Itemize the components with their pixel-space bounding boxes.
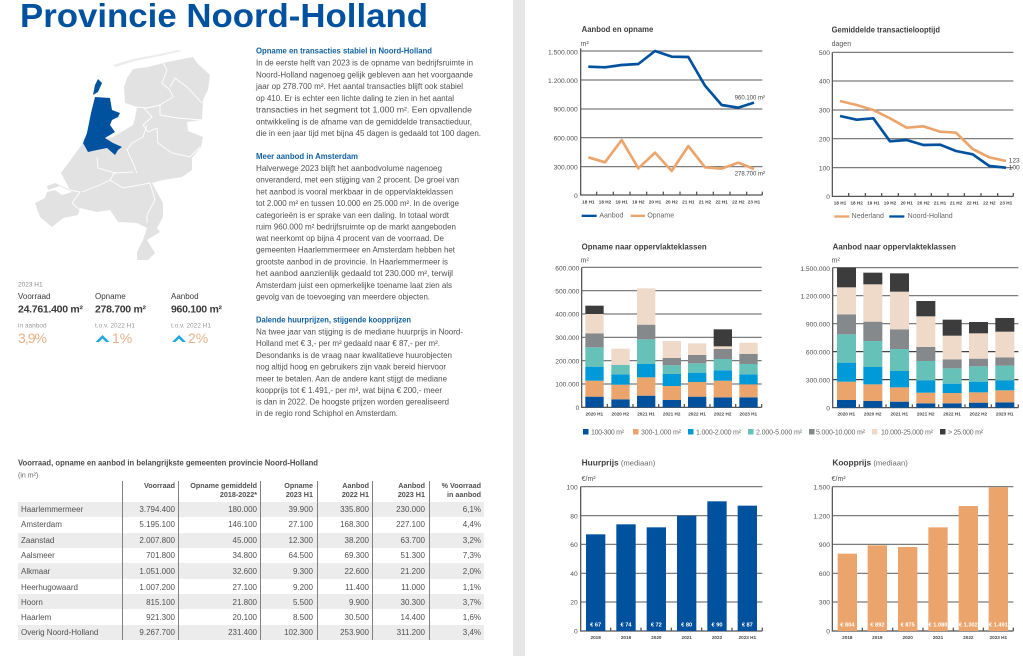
chart: Aanbod naar oppervlakteklassen: 1.200.000 [800,293,830,300]
chart: Huurprijs: 2020 [651,635,662,640]
row: Zaanstad: 45.000 [233,536,258,545]
chart: Huurprijs: 20 [570,600,578,607]
legend: oppervlakteklassen: 100-300 m² [591,430,625,436]
table header: Voorraad [144,481,175,490]
bar value labels: € 90 [711,622,723,628]
text block: dalende huurprijzen: Dalende huurprijzen, stijgende koopprijzen [256,316,411,325]
row: Haarlem: 8.500 [293,613,314,622]
bar 2022 H1 [688,343,706,407]
bar 2022 H2 [714,329,732,407]
chart: Gemiddelde transactielooptijd: 0 [826,194,830,201]
bar 2020 H2 [611,349,630,407]
chart: Aanbod naar oppervlakteklassen: 2023 H1 [996,411,1014,416]
chart title: Huurprijs (mediaan) [582,458,656,468]
chart: Opname naar oppervlakteklassen: 0 [576,405,580,412]
row: Haarlem: 20.100 [233,613,258,622]
chart: Huurprijs: 60 [570,542,578,549]
chart: Opname naar oppervlakteklassen: 2021 H2 [663,411,681,416]
row: Hoorn: 30.300 [401,598,426,607]
row: Aalsmeer: 7,3% [463,551,481,560]
text block: meer aanbod in Amsterdam: tot 2.000 m² en tussen 10.000 en 25.000 m². In de overige [256,199,460,208]
row: Overig Noord-Holland: 9.267.700 [139,628,176,637]
legend: Aanbod [599,213,624,220]
chart: Huurprijs [567,458,762,640]
chart: Aanbod en opname: 20 H2 [665,199,678,204]
text block: opname en transacties: Opname en transacties stabiel in Noord-Holland [256,46,432,56]
row: Aalsmeer: 69.300 [345,551,370,560]
table header: % Voorraad [442,481,481,490]
text block: dalende huurprijzen: koopprijs tot € 1.491,- per m², wat bijna € 200,- meer [256,386,442,395]
text block: opname en transacties: In de eerste helft van 2023 is de opname van bedrijfsruimte in [256,59,473,68]
row: Overig Noord-Holland: 231.400 [228,628,258,637]
chart: Aanbod naar oppervlakteklassen: 2020 H1 [838,411,856,416]
row: Overig Noord-Holland: 102.300 [284,628,314,637]
text block: opname en transacties [255,46,481,138]
row: Overig Noord-Holland: 311.200 [397,628,426,637]
row: Heerhugowaard [21,583,481,592]
bar value labels [590,622,753,628]
row: Haarlem: 921.300 [146,613,176,622]
text block: opname en transacties: transacties in het segment tot 1.000 m². Een opvallende [256,106,473,115]
bar 2022 H1 [943,320,962,408]
chart: Aanbod en opname: 900.000 [554,107,578,114]
row: Hoorn: 3,7% [463,598,481,607]
chart: Opname naar oppervlakteklassen: 2022 H1 [688,411,706,416]
bar value labels: € 892 [870,622,884,628]
row: Heerhugowaard: 1,1% [463,583,481,592]
bar 2022 H2 [969,322,988,408]
chart: Aanbod naar oppervlakteklassen [800,242,1018,416]
bar value labels: € 80 [681,622,692,628]
stat: Opname: t.o.v. 2022 H1 [95,322,135,330]
bar value labels: € 72 [651,622,662,628]
chart: Opname naar oppervlakteklassen: 100.000 [555,382,580,389]
chart: Koopprijs: 2018 [842,635,853,640]
bar value labels: € 804 [840,622,855,628]
stat: Aanbod: t.o.v. 2022 H1 [171,322,211,330]
row: Aalsmeer: 51.300 [401,551,426,560]
chart: Aanbod en opname: 300.000 [554,164,578,171]
stat: Voorraad: 3,9% [18,330,47,346]
chart: Gemiddelde transactielooptijd: 22 H2 [983,201,996,206]
table header: in aanbod [447,490,481,499]
text block: opname en transacties: op 410. Er is echter een lichte daling te zien in het aantal [256,94,454,103]
row: Hoorn: 815.100 [146,598,176,607]
table header [144,481,481,499]
map: grey provinces [35,57,210,260]
chart: Gemiddelde transactielooptijd: 100 [819,165,830,172]
row: Overig Noord-Holland: 253.900 [340,628,370,637]
row: Overig Noord-Holland: 3,4% [463,628,481,637]
row: Overig Noord-Holland [21,628,481,637]
row: Heerhugowaard: Heerhugowaard [21,583,78,592]
chart: Opname naar oppervlakteklassen: 400.000 [555,312,580,319]
chart: Aanbod naar oppervlakteklassen: 2020 H2 [864,411,882,416]
legend: Noord-Holland [908,213,953,220]
row: Haarlemmermeer: 230.000 [396,505,426,514]
row: Haarlem: Haarlem [21,613,52,622]
stat: Voorraad: in aanbod [18,322,47,330]
row: Heerhugowaard: 27.100 [233,583,258,592]
stat: Opname: Opname [95,292,126,301]
legend: Opname [647,213,674,220]
row: Zaanstad: 63.700 [401,536,426,545]
chart: Aanbod en opname: 1.500.000 [548,49,578,56]
row: Alkmaar: 22.600 [345,567,370,576]
chart: Koopprijs: 300 [819,600,830,607]
chart: Aanbod naar oppervlakteklassen: 2021 H1 [891,411,909,416]
chart: Aanbod en opname: 0 [574,193,578,200]
chart: Gemiddelde transactielooptijd: 19 H2 [884,201,897,206]
stat: Voorraad: 24.761.400 m² [18,304,84,316]
line: Nederland [840,101,1006,161]
chart: Huurprijs: 40 [570,571,578,578]
legend [834,213,953,220]
row: Amsterdam: 168.300 [340,520,370,529]
chart: Gemiddelde transactielooptijd: 19 H1 [867,201,880,206]
legend: oppervlakteklassen: > 25.000 m² [948,430,984,436]
chart title: Koopprijs (mediaan) [832,458,908,468]
chart: Aanbod naar oppervlakteklassen: m² [832,258,840,265]
text block: meer aanbod in Amsterdam: Halverwege 2023 blijft het aanbodvolume nagenoeg [256,164,442,173]
text block: opname en transacties: ontwikkeling is de afname van de gemiddelde transactieduur, [256,118,472,126]
row: Amsterdam: 5.195.100 [139,520,176,529]
stat: Aanbod [171,292,222,346]
bars [586,501,757,631]
row: Aalsmeer [21,551,481,560]
legend: oppervlakteklassen: 10.000-25.000 m² [881,430,934,436]
table header: Aanbod [398,481,425,490]
chart: Koopprijs: €/m² [832,476,846,483]
row: Alkmaar: 1.051.000 [139,567,176,576]
bar value labels: € 1.491 [989,622,1008,628]
row: Zaanstad: 38.200 [345,536,370,545]
bar value labels [840,622,1008,628]
period label: 2023 H1 [18,282,43,288]
table header: Opname [284,481,313,490]
row: Haarlemmermeer: 6,1% [463,505,481,514]
chart: Aanbod en opname: 19 H1 [615,199,628,204]
chart: Opname naar oppervlakteklassen: 2020 H2 [612,411,630,416]
chart: Aanbod en opname: 20 H1 [649,199,662,204]
chart: Koopprijs [813,458,1013,640]
stat: Opname: 278.700 m² [95,304,146,316]
data labels: 123 [1009,157,1020,164]
chart: Aanbod en opname: 22 H1 [715,199,728,204]
text block: meer aanbod in Amsterdam: categorieën is er sprake van een daling. In totaal wordt [256,211,450,220]
text block: opname en transacties: die in een jaar tijd met bijna 45 dagen is gedaald tot 100 dagen. [256,129,481,138]
text block: meer aanbod in Amsterdam: wat neerkomt op bijna 4 procent van de voorraad. De [255,234,445,243]
text block: dalende huurprijzen [256,316,463,418]
chart: Koopprijs: 600 [819,571,830,578]
row: Amsterdam: 227.100 [396,520,426,529]
chart: Koopprijs: 2023 H1 [990,635,1008,640]
row: Haarlemmermeer: Haarlemmermeer [21,505,84,514]
table header: 2023 H1 [286,490,313,499]
chart: Aanbod en opname [548,24,765,220]
chart: Aanbod en opname: 21 H2 [699,199,712,204]
bar 2021 H2 [663,341,681,407]
chart: Gemiddelde transactielooptijd: 300 [819,108,830,115]
table header: Aanbod [342,481,369,490]
chart: Aanbod naar oppervlakteklassen: 2021 H2 [917,411,935,416]
text block: dalende huurprijzen: meer te betalen. Aan de andere kant stijgt de mediane [256,374,448,384]
row: Hoorn: Hoorn [21,598,43,607]
chart title: Aanbod naar oppervlakteklassen [833,242,956,252]
table header: Opname gemiddeld [190,481,257,490]
chart: Koopprijs: 2019 [872,635,883,640]
chart: Huurprijs: 2018 [590,635,601,640]
text block: meer aanbod in Amsterdam: gemeenten Haarlemmermeer en Amsterdam hebben het [256,246,456,255]
bar 2021 H1 [637,288,655,407]
chart: Gemiddelde transactielooptijd: 500 [819,50,830,57]
text block: dalende huurprijzen: Desondanks is de vraag naar kwalitatieve huurobjecten [256,351,452,360]
bar value labels: € 67 [590,622,601,628]
chart: Opname naar oppervlakteklassen: 2022 H2 [714,411,732,416]
row: Amsterdam [21,520,481,529]
row: Amsterdam: 27.100 [289,520,314,529]
row: Alkmaar: 9.300 [293,567,314,576]
row: Amsterdam: 146.100 [228,520,258,529]
text block: opname en transacties: Noord-Holland nagenoeg gelijk gebleven aan het voorgaande [256,70,474,80]
chart: Gemiddelde transactielooptijd: 20 H2 [917,201,930,206]
chart: Aanbod naar oppervlakteklassen: 0 [826,405,830,412]
text block: dalende huurprijzen: in de regio rond Schiphol en Amsterdam. [256,409,398,418]
text block: meer aanbod in Amsterdam: het aanbod is vooral merkbaar in de oppervlakteklassen [256,188,453,196]
chart: Gemiddelde transactielooptijd [819,25,1020,220]
chart: Aanbod naar oppervlakteklassen: 1.500.000 [800,266,830,273]
chart: Aanbod naar oppervlakteklassen: 2022 H2 [970,411,988,416]
chart: Huurprijs: 2022 [712,635,723,640]
bar value labels: € 1.080 [929,622,947,628]
bars [838,487,1008,631]
row: Aalsmeer: Aalsmeer [21,551,55,560]
row: Haarlemmermeer: 180.000 [228,505,258,514]
bar 2023 H1 [995,318,1014,408]
chart: Koopprijs: 900 [819,542,830,549]
table header: 2022 H1 [342,490,369,499]
line: Aanbod [588,51,754,108]
bar 2021 H1 [890,273,909,408]
text block: dalende huurprijzen: Na twee jaar van stijging is de mediane huurprijs in Noord- [256,328,463,337]
row: Zaanstad: 12.300 [289,536,314,545]
legend: oppervlakteklassen: 300-1.000 m² [641,430,682,436]
row: Zaanstad: 3,2% [463,536,481,545]
bar value labels: € 875 [901,622,915,628]
chart: Aanbod en opname: 22 H2 [732,199,745,204]
stat: Aanbod: 960.100 m² [171,304,222,316]
row: Aalsmeer: 34.800 [233,551,258,560]
chart: Opname naar oppervlakteklassen [555,242,762,416]
chart title: Aanbod en opname [582,24,654,34]
row: Zaanstad [21,536,481,545]
stat: Opname: 1% [112,330,132,346]
chart: Huurprijs: 2019 [621,635,632,640]
chart: Huurprijs: 0 [574,629,578,636]
map: Noord-Holland [83,79,122,155]
row: Haarlemmermeer: 3.794.400 [139,505,176,514]
bar value labels: € 1.302 [959,622,978,628]
chart: Aanbod naar oppervlakteklassen: 2022 H1 [943,411,961,416]
line: Noord-Holland [840,116,1006,168]
row: Hoorn: 9.900 [349,598,370,607]
chart: Gemiddelde transactielooptijd: dagen [832,41,851,48]
line: Opname [588,140,754,171]
data labels: 278.700 m² [735,171,765,177]
stat: Voorraad: Voorraad [18,292,50,301]
chart: Aanbod naar oppervlakteklassen: 600.000 [806,349,830,356]
chart: Opname naar oppervlakteklassen: 2023 H1 [740,411,758,416]
chart title: Opname naar oppervlakteklassen [582,242,707,252]
row: Aalsmeer: 64.500 [289,551,314,560]
row: Alkmaar: Alkmaar [21,567,51,576]
text block: dalende huurprijzen: Holland met € 3,- per m² gedaald naar € 87,- per m². [256,339,440,348]
chart: Aanbod en opname: 600.000 [554,135,578,142]
row: Zaanstad: Zaanstad [21,536,54,545]
text block: opname en transacties: jaar op 278.700 m². Het aantal transacties blijft ook stabiel [255,82,463,91]
row: Haarlemmermeer [21,505,481,514]
text block: dalende huurprijzen: nog altijd hoog en gebruikers zijn vaak bereid hiervoor [256,363,446,372]
data labels [1009,157,1020,171]
row: Hoorn: 5.500 [293,598,314,607]
row: Haarlem [21,613,481,622]
chart: Koopprijs: 1.200 [813,513,830,520]
chart: Opname naar oppervlakteklassen: 200.000 [555,358,580,365]
table header: 2023 H1 [398,490,425,499]
table header: 2018-2022* [220,490,257,499]
chart: Koopprijs: 1.500 [813,484,830,491]
chart: Gemiddelde transactielooptijd: 18 H1 [834,201,847,206]
chart: Aanbod en opname: m² [581,41,589,48]
data labels: 100 [1009,164,1020,171]
chart: Huurprijs: 100 [567,484,578,491]
chart title: Gemiddelde transactielooptijd [832,25,940,35]
chart: Opname naar oppervlakteklassen: 2020 H1 [586,411,604,416]
chart: Koopprijs: 2020 [902,635,913,640]
legend [582,213,674,220]
text block: meer aanbod in Amsterdam: het aanbod aanzienlijk gedaald tot 230.000 m², terwijl [256,269,453,278]
chart: Opname naar oppervlakteklassen: 2021 H1 [637,411,655,416]
legend: oppervlakteklassen [583,429,984,436]
bar value labels: € 74 [620,622,632,628]
text block: meer aanbod in Amsterdam [255,152,460,302]
row: Alkmaar: 32.600 [233,567,258,576]
chart: Huurprijs: 2023 H1 [739,635,757,640]
legend: oppervlakteklassen: 1.000-2.000 m² [696,430,742,436]
data labels [735,96,765,177]
bar 2020 H1 [585,306,604,407]
text block: meer aanbod in Amsterdam: grootste aanbod in de provincie. In Haarlemmermeer is [256,258,448,266]
legend: oppervlakteklassen: 5.000-10.000 m² [816,430,866,436]
bar value labels: € 87 [742,622,753,628]
chart: Gemiddelde transactielooptijd: 20 H1 [900,201,913,206]
table unit: (in m²) [18,472,38,480]
row: Alkmaar [21,567,481,576]
stat: Voorraad [18,292,84,346]
row: Amsterdam: 4,4% [463,520,481,529]
row: Hoorn: 21.800 [233,598,258,607]
chart: Aanbod en opname: 18 H2 [599,199,612,204]
key figures [18,282,222,346]
chart: Gemiddelde transactielooptijd: 200 [819,136,830,143]
chart: Aanbod en opname: 19 H2 [632,199,645,204]
chart: Opname naar oppervlakteklassen: 300.000 [555,335,580,342]
chart: Koopprijs: 2022 [963,635,974,640]
row: Heerhugowaard: 9.200 [293,583,314,592]
map: province borders [70,63,202,223]
row: Haarlemmermeer: 335.800 [340,505,370,514]
text block: meer aanbod in Amsterdam: gevolg van de toevoeging van meerdere objecten. [256,293,430,302]
stat: Aanbod: 2% [188,330,208,346]
chart: Gemiddelde transactielooptijd: 400 [819,79,830,86]
chart: Gemiddelde transactielooptijd: 18 H2 [850,201,863,206]
stat: Aanbod: Aanbod [171,292,199,301]
row: Overig Noord-Holland: Overig Noord-Holland [21,628,98,637]
chart: Aanbod en opname: 21 H1 [682,199,695,204]
chart: Huurprijs: €/m² [582,476,596,483]
chart: Gemiddelde transactielooptijd: 23 H1 [1000,201,1013,206]
chart: Aanbod en opname: 23 H1 [748,199,761,204]
chart: Huurprijs: 2021 [681,635,692,640]
text block: meer aanbod in Amsterdam: onveranderd, met een stijging van 2 procent. De groei van [256,176,459,185]
row: Alkmaar: 2,0% [463,567,481,576]
row: Heerhugowaard: 11.400 [345,583,370,592]
row: Alkmaar: 21.200 [401,567,426,576]
row: Haarlem: 1,6% [463,613,481,622]
chart: Gemiddelde transactielooptijd: 21 H1 [934,201,947,206]
table: voorraad, opname en aanbod [18,458,484,640]
chart: Opname naar oppervlakteklassen: 600.000 [555,266,580,273]
row: Heerhugowaard: 11.000 [401,583,426,592]
legend: oppervlakteklassen: 2.000-5.000 m² [756,430,803,436]
bar 2020 H1 [837,268,856,408]
text block: dalende huurprijzen: is dan in 2022. De hoogste prijzen worden gerealiseerd [256,398,449,407]
chart: Gemiddelde transactielooptijd: 21 H2 [950,201,963,206]
row: Haarlem: 14.400 [401,613,426,622]
text block: meer aanbod in Amsterdam: Amsterdam juist een opmerkelijke toename laat zien als [256,281,452,290]
row: Hoorn [21,598,481,607]
chart: Aanbod naar oppervlakteklassen: 300.000 [806,377,830,384]
bar 2021 H2 [916,301,935,408]
chart: Aanbod naar oppervlakteklassen: 900.000 [806,321,830,328]
row: Aalsmeer: 701.800 [146,551,176,560]
text block: meer aanbod in Amsterdam: ruim 960.000 m² bedrijfsruimte op de markt aangeboden [256,223,456,232]
row: Amsterdam: Amsterdam [21,520,62,529]
chart: Koopprijs: 0 [826,629,830,636]
data labels: 960.100 m² [735,96,765,102]
map: Netherlands with Noord-Holland highlighted [35,50,210,260]
bar 2020 H2 [863,273,882,408]
row: Haarlem: 30.500 [345,613,370,622]
table title: Voorraad, opname en aanbod in belangrijkste gemeenten provincie Noord-Holland [18,458,318,468]
chart: Aanbod en opname: 1.200.000 [548,78,578,85]
chart: Opname naar oppervlakteklassen: 500.000 [555,288,580,295]
bar 2023 H1 [739,343,758,407]
chart: Gemiddelde transactielooptijd: 22 H1 [966,201,979,206]
chart: Aanbod en opname: 18 H1 [582,199,595,204]
text block: meer aanbod in Amsterdam: Meer aanbod in Amsterdam [256,152,358,161]
chart: Koopprijs: 2021 [933,635,944,640]
chart: Opname naar oppervlakteklassen: m² [581,258,589,265]
legend: Nederland [852,213,884,220]
row: Heerhugowaard: 1.007.200 [139,583,176,592]
chart: Huurprijs: 80 [570,513,578,520]
row: Zaanstad: 2.007.800 [139,536,176,545]
row: Haarlemmermeer: 39.900 [289,505,314,514]
stat: Opname [95,292,146,346]
